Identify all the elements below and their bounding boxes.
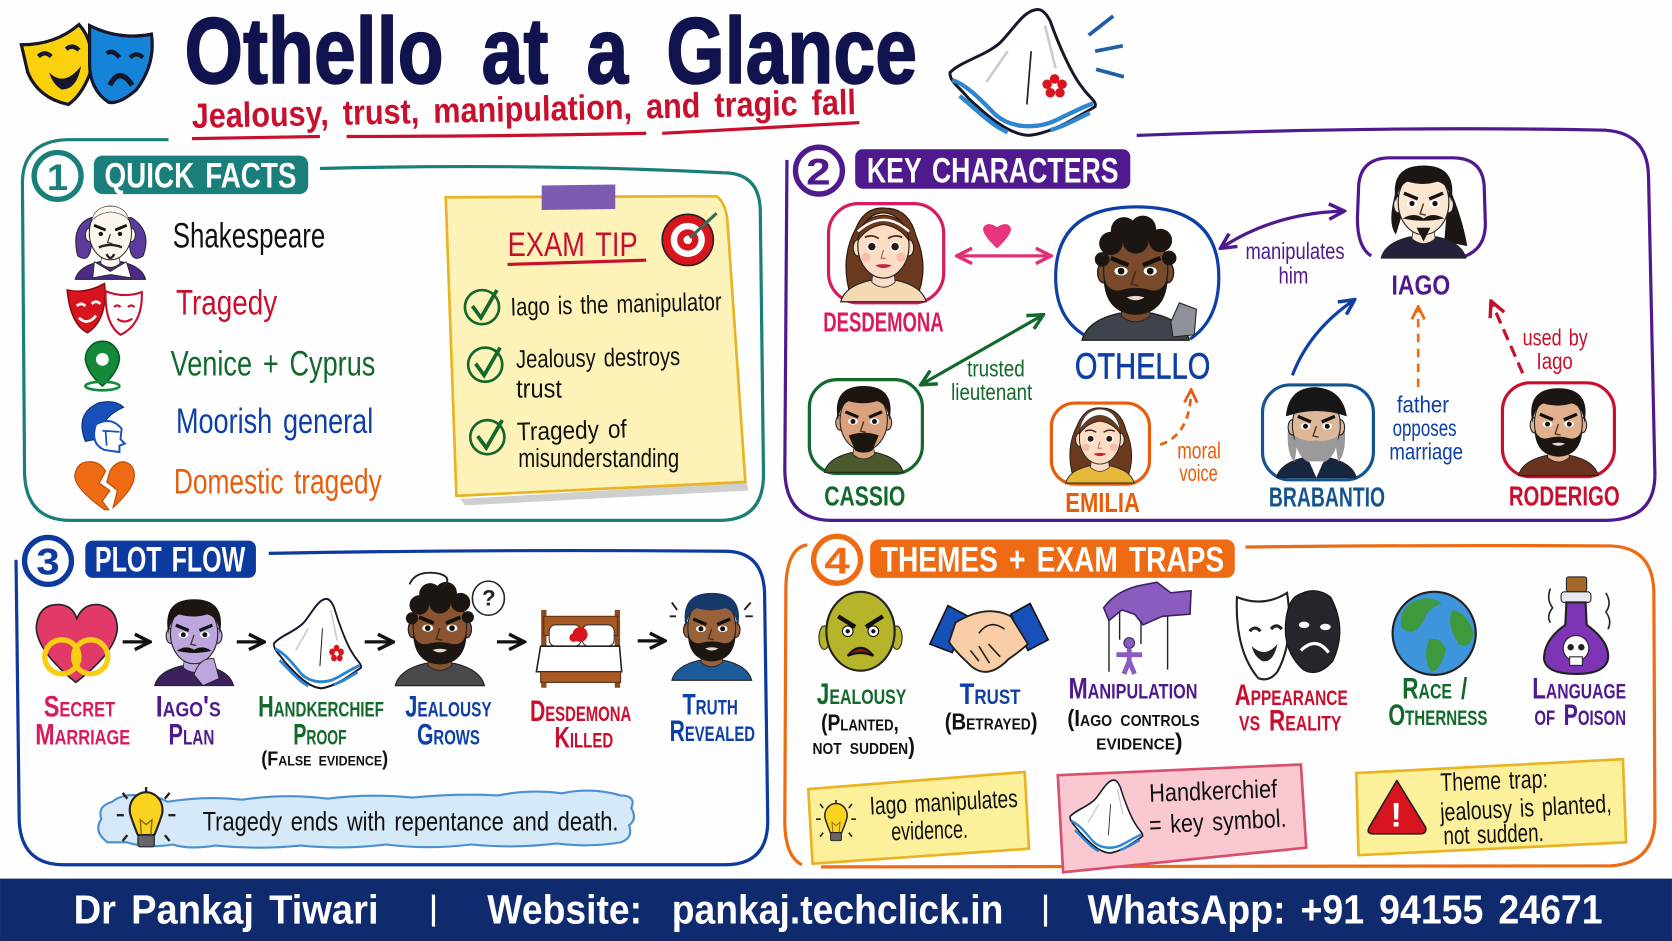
arrow [638, 639, 663, 642]
tip 3 [470, 415, 679, 473]
relationship: Desdemona and Othello [959, 224, 1049, 256]
note: Iago manipulates evidence [808, 772, 1029, 864]
relationship: Roderigo used by Iago [1492, 303, 1588, 374]
theme: trust: Trust [960, 678, 1021, 711]
relationship: father opposes marriage [1389, 308, 1463, 465]
panel: themes and exam traps [785, 536, 1655, 872]
note: theme trap: ! [1390, 796, 1402, 834]
icon: target [662, 213, 717, 266]
fact text: Moorish general [176, 402, 373, 441]
step: jealousy grows: Grows [417, 718, 480, 751]
character: Emilia [1051, 403, 1149, 518]
subtitle underline [192, 123, 859, 139]
tip 2 [468, 343, 680, 404]
step: handkerchief proof: Proof [293, 718, 347, 751]
step: secret marriage [35, 605, 130, 751]
heading: KEY CHARACTERS [867, 151, 1119, 190]
relationship: Iago manipulates Othello: manipulates [1245, 238, 1345, 264]
character: Brabantio [1263, 385, 1385, 512]
character: Othello: OTHELLO [1075, 346, 1210, 387]
step: handkerchief proof: Handkerchief [258, 691, 384, 724]
panel border [785, 129, 1655, 520]
theme: jealousy: Jealousy [817, 678, 906, 711]
theme: race and otherness: Otherness [1388, 699, 1488, 732]
relationship: Brabantio to Iago [1292, 301, 1353, 375]
note paper [446, 196, 745, 496]
title block [21, 0, 1124, 139]
relationship: father opposes marriage: father [1397, 392, 1449, 418]
footer bar [0, 879, 1672, 941]
fact text: Shakespeare [173, 216, 325, 255]
note: theme trap: not sudden. [1443, 819, 1544, 850]
number badge: 2 [806, 150, 831, 192]
note: theme trap [1356, 759, 1626, 855]
step: jealousy grows: ? [482, 586, 496, 611]
theme: language of poison [1532, 577, 1626, 732]
step: handkerchief proof: (False evidence) [261, 749, 388, 771]
panel: key characters [785, 129, 1655, 520]
relationship: Roderigo used by Iago: used by [1523, 324, 1588, 350]
whatsapp: WhatsApp: +91 94155 24671 [1088, 886, 1603, 932]
step: truth revealed [670, 593, 755, 748]
website: Website: pankaj.techclick.in [487, 886, 1003, 932]
relationship: Emilia moral voice: voice [1179, 460, 1218, 486]
character: Cassio [809, 380, 922, 511]
callout: tragedy ends [98, 787, 634, 848]
step: Desdemona killed: Desdemona [530, 695, 631, 728]
character: Desdemona: DESDEMONA [823, 307, 944, 338]
icon: location pin [85, 341, 119, 390]
heading: THEMES + EXAM TRAPS [881, 541, 1224, 580]
relationship: Emilia moral voice: moral [1177, 438, 1221, 464]
number badge [814, 536, 861, 583]
theme: appearance vs reality: Appearance [1235, 679, 1348, 712]
note: theme trap: jealousy is planted, [1439, 790, 1612, 827]
theme: jealousy [813, 592, 915, 759]
theme: language of poison: Language [1532, 672, 1626, 705]
exam tip note [446, 184, 749, 505]
icon: broken heart [75, 462, 134, 510]
step: jealousy grows [395, 573, 504, 751]
relationship: Cassio trusted lieutenant: trusted [967, 355, 1025, 381]
relationship: Emilia moral voice [1160, 391, 1221, 486]
theme: manipulation: evidence) [1096, 729, 1183, 755]
main title: Othello at a Glance [184, 0, 917, 103]
heading: QUICK FACTS [105, 157, 296, 196]
icon: helmet [82, 402, 125, 452]
panel: plot flow [16, 537, 768, 865]
arrow [123, 640, 148, 643]
theme: appearance vs reality: vs Reality [1239, 704, 1341, 737]
separator [432, 895, 435, 927]
theme: trust [930, 604, 1048, 734]
step: Iago's plan [155, 599, 234, 751]
step: truth revealed: Truth [682, 688, 738, 721]
arrow [365, 640, 391, 643]
step: secret marriage: Marriage [35, 718, 130, 751]
step: Desdemona killed [530, 610, 631, 754]
character: Brabantio: BRABANTIO [1269, 481, 1385, 512]
theme: race and otherness: Race / [1402, 672, 1467, 705]
note: handkerchief key symbol: = key symbol. [1148, 805, 1287, 840]
note heading: EXAM TIP [508, 226, 638, 264]
panel: quick facts [22, 140, 763, 520]
note: theme trap: Theme trap: [1440, 765, 1548, 797]
author name: Dr Pankaj Tiwari [74, 886, 379, 932]
note: handkerchief key symbol [1058, 765, 1306, 872]
note: handkerchief key symbol: Handkerchief [1149, 775, 1278, 808]
character: Iago: IAGO [1392, 269, 1450, 300]
theme: manipulation: (Iago controls [1067, 705, 1200, 731]
tip 1: Iago is the manipulator [510, 288, 722, 322]
character: Othello [1056, 207, 1219, 387]
theme: language of poison: of Poison [1534, 699, 1626, 732]
tip 3: Tragedy of [517, 415, 628, 446]
tip 1 [465, 288, 722, 324]
heading: PLOT FLOW [95, 541, 246, 580]
step: secret marriage: Secret [44, 691, 115, 724]
fact text: Domestic tragedy [174, 463, 382, 502]
relationship: Iago manipulates Othello: him [1279, 263, 1308, 289]
character: Cassio: CASSIO [824, 480, 905, 511]
relationship: Cassio trusted lieutenant: lieutenant [951, 379, 1033, 405]
character: Roderigo: RODERIGO [1509, 480, 1620, 511]
fact text: Venice + Cyprus [171, 344, 375, 383]
number badge: 1 [47, 156, 68, 198]
number badge: 3 [36, 541, 60, 583]
character: Iago [1357, 158, 1485, 300]
theme: race and otherness [1388, 592, 1488, 732]
character: Emilia: EMILIA [1065, 487, 1140, 518]
theme: jealousy: (Planted, [821, 709, 899, 735]
step: handkerchief proof [258, 599, 388, 771]
theme: appearance vs reality [1235, 591, 1348, 737]
relationship: father opposes marriage: marriage [1389, 439, 1463, 465]
tape [542, 184, 615, 210]
theme: manipulation [1067, 582, 1200, 755]
separator [1044, 895, 1047, 927]
number badge [34, 152, 81, 199]
theme: jealousy: not sudden) [813, 733, 915, 759]
note shadow [461, 482, 749, 505]
relationship: Iago manipulates Othello [1222, 211, 1345, 289]
number badge [795, 147, 842, 194]
tip 2: trust [516, 376, 562, 404]
number badge: 4 [824, 540, 850, 582]
character: Roderigo [1502, 383, 1620, 511]
number badge [25, 537, 71, 584]
step: Iago's plan: Iago's [156, 691, 221, 724]
panel border [785, 545, 1655, 867]
icon: Shakespeare [75, 206, 146, 279]
note: Iago manipulates evidence: Iago manipulates [869, 785, 1018, 821]
tip 3: misunderstanding [518, 445, 679, 473]
relationship: Cassio trusted lieutenant [922, 316, 1042, 405]
panel border [22, 140, 763, 520]
step: truth revealed: Revealed [670, 715, 755, 748]
arrow [497, 640, 523, 643]
step: Iago's plan: Plan [169, 718, 214, 751]
note: Iago manipulates evidence: evidence. [891, 816, 968, 846]
theme: manipulation: Manipulation [1068, 672, 1197, 705]
relationship: Roderigo used by Iago: Iago [1537, 348, 1573, 374]
callout: tragedy ends: Tragedy ends with repentance and death. [203, 807, 618, 837]
panel border [16, 551, 768, 865]
arrow [237, 640, 262, 643]
heading underline [508, 260, 646, 264]
fact text: Tragedy [176, 284, 278, 323]
subtitle: Jealousy, trust, manipulation, and tragic fall [191, 83, 856, 136]
step: Desdemona killed: Killed [554, 721, 613, 754]
theme: trust: (Betrayed) [945, 708, 1038, 734]
icon: handkerchief [950, 10, 1124, 135]
relationship: father opposes marriage: opposes [1393, 415, 1457, 441]
tip 2: Jealousy destroys [516, 343, 680, 374]
character: Desdemona [823, 204, 944, 338]
icon: red and white masks [67, 284, 142, 335]
icon: comedy and tragedy masks [21, 25, 152, 104]
step: jealousy grows: Jealousy [405, 691, 492, 724]
